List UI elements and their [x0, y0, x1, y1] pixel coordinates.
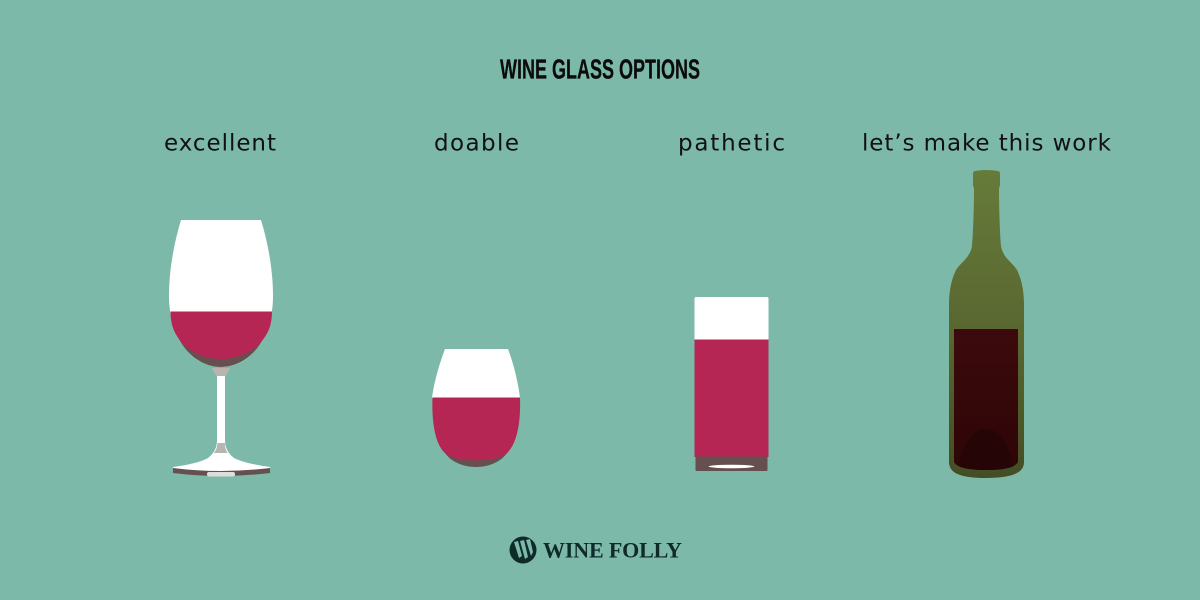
punt shadow [958, 429, 1014, 470]
glass [694, 297, 768, 340]
icon: wine bottle [949, 170, 1024, 478]
stem joint bottom [214, 443, 228, 453]
wine [170, 312, 272, 359]
infographic canvas [165, 59, 1111, 564]
bowl shadow [178, 336, 264, 367]
logo wordmark: WINE FOLLY [543, 538, 682, 562]
icon: large wine glass [169, 220, 273, 476]
stem joint top [212, 368, 230, 376]
label: excellent: excellent [164, 130, 276, 156]
base highlight [708, 465, 754, 468]
glass base [696, 456, 768, 471]
wine [432, 398, 520, 460]
glass base shadow [443, 450, 509, 467]
icon: tall tumbler [694, 297, 768, 471]
icon: stemless glass [432, 349, 520, 467]
glass bowl [169, 220, 273, 367]
foot engraving [207, 472, 235, 476]
logo mark [510, 536, 536, 564]
logo: Wine Folly [510, 536, 682, 564]
wine [694, 340, 768, 457]
glass [432, 349, 520, 398]
title: WINE GLASS OPTIONS [500, 54, 700, 84]
stem [173, 368, 270, 472]
foot shadow [173, 468, 270, 476]
bottle body [949, 170, 1024, 478]
label: doable: doable [434, 130, 519, 156]
label: pathetic: pathetic [678, 130, 785, 156]
label: let's make this work: let’s make this work [862, 130, 1112, 156]
bottle label [954, 329, 1018, 470]
